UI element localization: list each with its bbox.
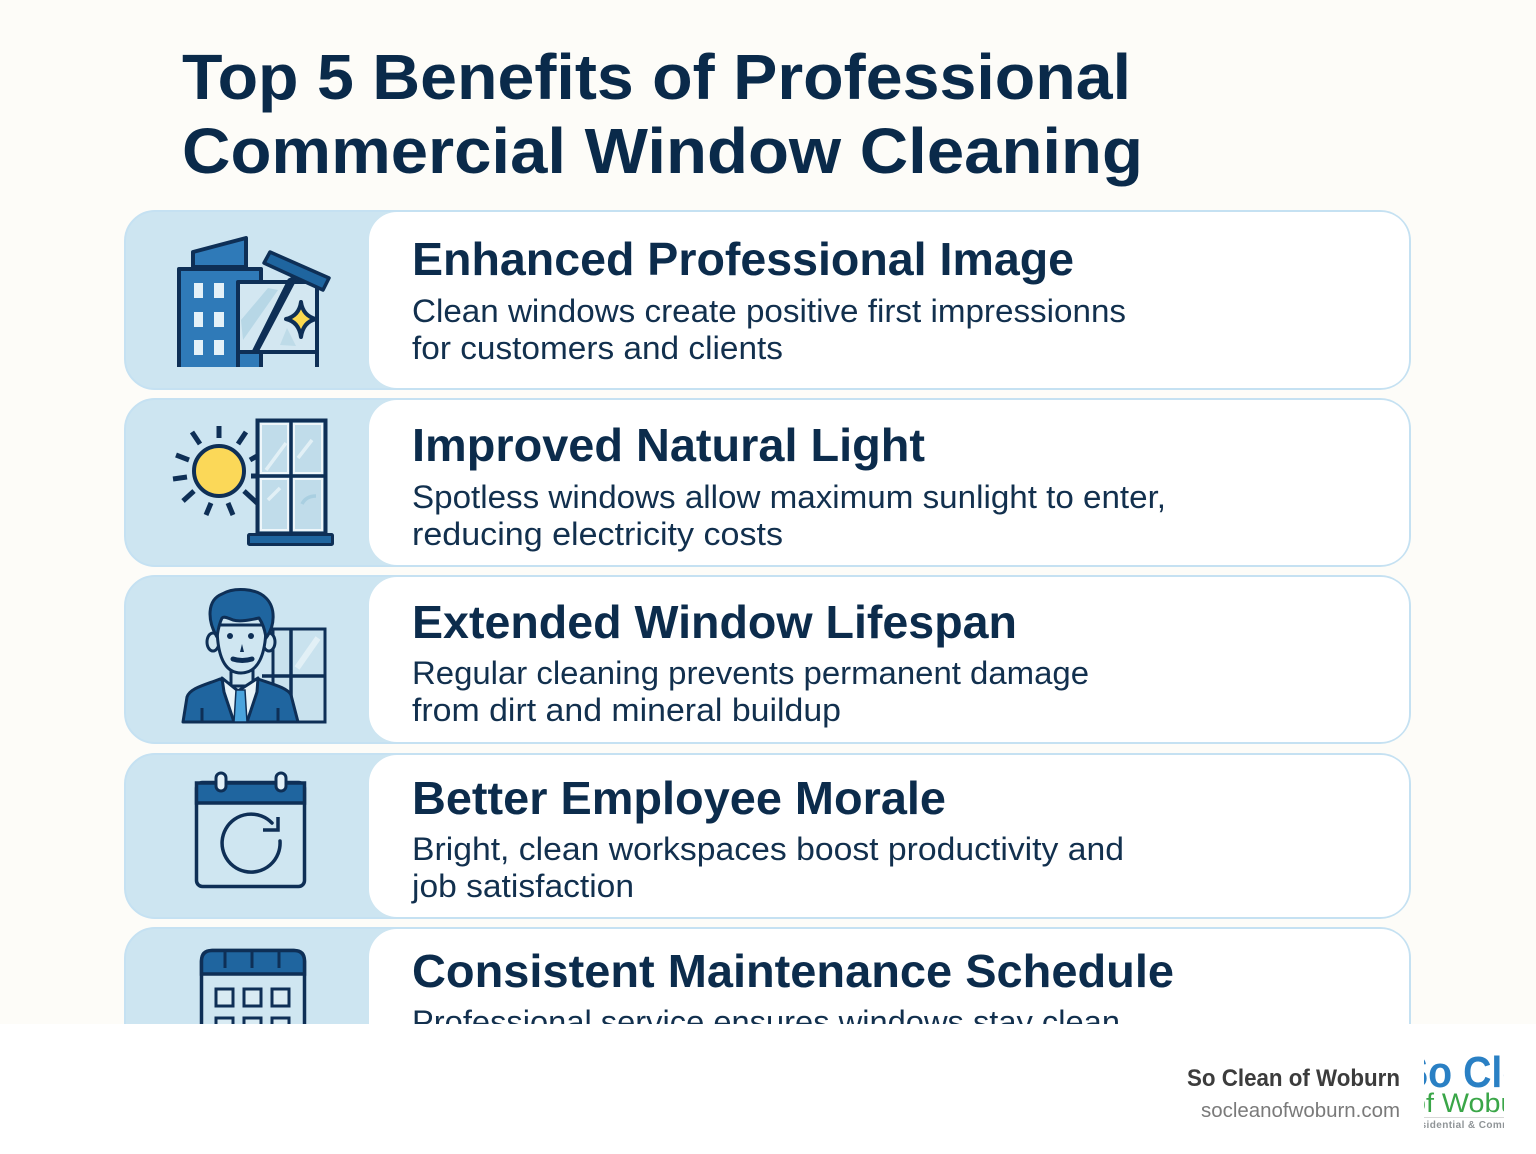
- description: for customers and clients: [412, 330, 783, 366]
- logo: of Woburn: [1410, 1088, 1536, 1118]
- description: [412, 479, 1166, 552]
- panel: better employee morale: [125, 754, 1410, 918]
- description: from dirt and mineral buildup: [412, 692, 841, 728]
- logo: Residential & Commercial: [1407, 1120, 1536, 1131]
- title: Commercial Window Cleaning: [182, 115, 1143, 187]
- heading: Enhanced Professional Image: [412, 233, 1074, 285]
- heading: Improved Natural Light: [412, 419, 925, 471]
- icon: calendar grid: [200, 948, 306, 1024]
- heading: Better Employee Morale: [412, 772, 946, 824]
- icon: businessman and window: [183, 589, 325, 722]
- panel: enhanced professional image: [125, 211, 1410, 389]
- icon: building and squeegee: [179, 238, 329, 367]
- icon: recurring calendar: [196, 773, 304, 886]
- icon: sparkle: [286, 302, 316, 337]
- panel: consistent maintenance schedule: [124, 927, 1411, 1024]
- description: [412, 293, 1126, 366]
- description: [411, 831, 1124, 904]
- description: Spotless windows allow maximum sunlight to enter,: [412, 479, 1166, 515]
- heading: Extended Window Lifespan: [412, 596, 1017, 648]
- description: job satisfaction: [411, 868, 634, 904]
- website: socleanofwoburn.com: [1201, 1100, 1400, 1122]
- description: Bright, clean workspaces boost productivity and: [412, 831, 1124, 867]
- description: Regular cleaning prevents permanent damage: [412, 655, 1089, 691]
- heading: Consistent Maintenance Schedule: [412, 945, 1174, 997]
- description: Professional service ensures windows stay clean: [412, 1004, 1120, 1040]
- footer: [1188, 1056, 1504, 1128]
- brand name: So Clean of Woburn: [1187, 1065, 1400, 1092]
- description: Clean windows create positive first impressionns: [412, 293, 1126, 329]
- title: [182, 41, 1143, 187]
- description: reducing electricity costs: [412, 516, 783, 552]
- panel: extended window lifespan: [125, 576, 1410, 743]
- description: [412, 655, 1089, 728]
- panel: improved natural light: [125, 399, 1410, 566]
- title: Top 5 Benefits of Professional: [182, 41, 1131, 113]
- icon: sun and window: [173, 420, 332, 544]
- logo: [1424, 1056, 1504, 1128]
